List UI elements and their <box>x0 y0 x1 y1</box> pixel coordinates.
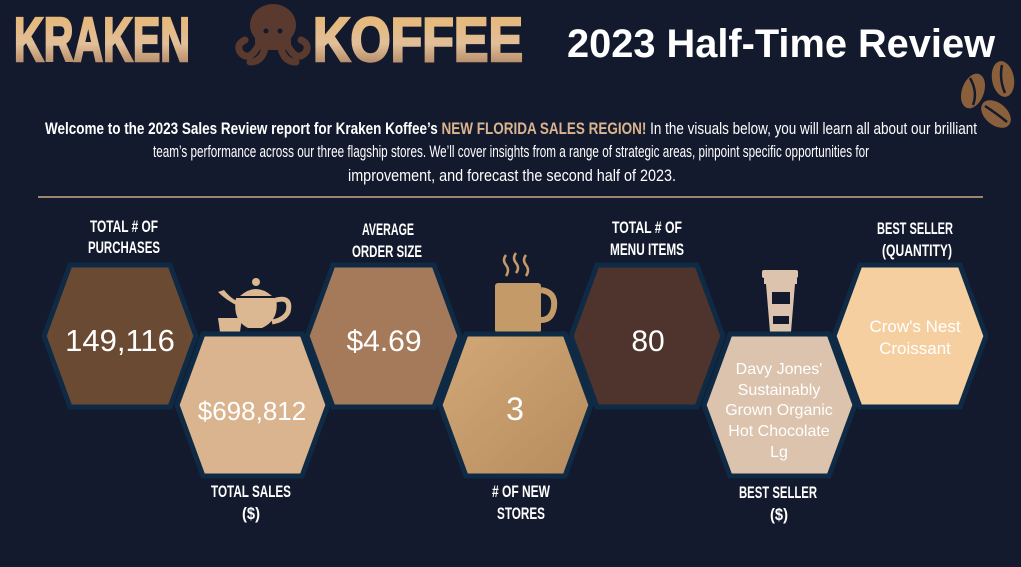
label: total sales <box>211 482 291 523</box>
label: average order size: AVERAGE <box>362 220 414 239</box>
label: new stores: STORES <box>497 504 545 523</box>
hexagon: best seller $: Hot Chocolate <box>728 423 830 440</box>
intro text: improvement, and forecast the second half of 2023. <box>348 166 676 185</box>
hexagon: total sales <box>177 334 328 476</box>
label: new stores <box>492 482 551 523</box>
hexagon: menu items <box>571 265 723 407</box>
label: best seller $: ($) <box>770 505 788 524</box>
title: 2023 Half-Time Review <box>567 22 996 66</box>
label: average order size: ORDER SIZE <box>352 242 422 261</box>
logo <box>14 4 523 75</box>
hexagon: total purchases <box>44 265 196 407</box>
label: total purchases: TOTAL # OF <box>90 217 158 236</box>
hexagon: average order size <box>307 265 460 407</box>
hexagon: new stores <box>440 334 591 476</box>
hexagon: best seller quantity <box>834 265 986 407</box>
hexagon: best seller quantity: Crow's Nest <box>869 317 961 336</box>
intro text <box>45 119 977 185</box>
logo: KOFFEE <box>313 6 523 75</box>
label: total sales: ($) <box>242 504 260 523</box>
label: menu items: TOTAL # OF <box>612 218 682 237</box>
label: total sales: TOTAL SALES <box>211 482 291 501</box>
label: menu items: MENU ITEMS <box>610 240 684 259</box>
hexagon: best seller $: Grown Organic <box>725 402 833 419</box>
icon: octopus <box>239 4 307 62</box>
label: best seller quantity: BEST SELLER <box>877 219 953 238</box>
label: new stores: # OF NEW <box>492 482 551 501</box>
label: total purchases <box>88 217 160 257</box>
icon: mug <box>495 253 554 333</box>
label: best seller $: BEST SELLER <box>739 483 817 502</box>
icon: takeaway cup <box>762 270 798 332</box>
icon: coffee beans <box>957 59 1017 133</box>
hexagon: total purchases: 149,116 <box>65 323 175 358</box>
hexagon: best seller $: Lg <box>770 444 788 461</box>
label: best seller $ <box>739 483 817 524</box>
label: menu items <box>610 218 684 259</box>
label: best seller quantity: (QUANTITY) <box>882 241 952 260</box>
hexagon: best seller $: Davy Jones' <box>736 361 822 378</box>
logo: KRAKEN <box>14 6 190 75</box>
icon: teapot <box>218 278 289 332</box>
hexagon: total sales: $698,812 <box>198 396 306 426</box>
label: best seller quantity <box>877 219 953 260</box>
hexagon: best seller quantity: Croissant <box>879 339 951 358</box>
hexagon: menu items: 80 <box>631 325 665 358</box>
hexagon: new stores: 3 <box>506 391 524 427</box>
hexagon: best seller $: Sustainably <box>738 382 820 399</box>
hexagon: best seller $ <box>704 334 855 476</box>
label: average order size <box>352 220 422 261</box>
hexagon: average order size: $4.69 <box>346 325 422 358</box>
label: total purchases: PURCHASES <box>88 238 160 257</box>
